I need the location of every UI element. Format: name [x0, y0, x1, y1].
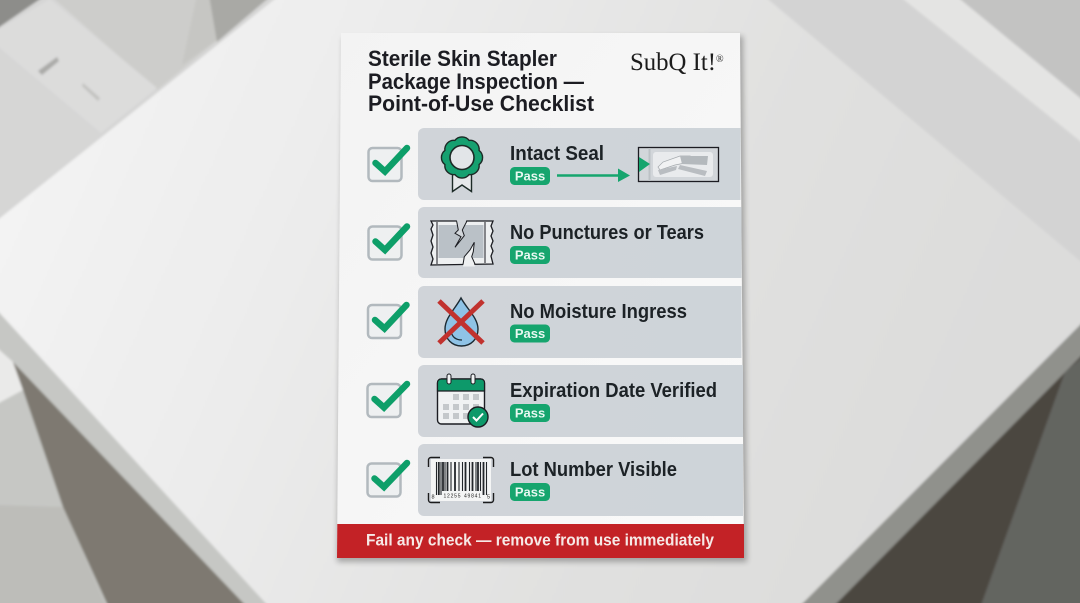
icon: barcode: 5 [487, 494, 490, 500]
icon: seal rosette [441, 137, 483, 192]
warning banner: Fail any check — remove from use immediately [366, 532, 715, 550]
row 4: expiration date verified [368, 365, 743, 437]
background: lower right cabinet [798, 320, 1080, 603]
item label: lot number visible: Lot Number Visible [510, 459, 677, 481]
panel: checklist card [337, 33, 744, 558]
background: upper left room [0, 0, 280, 222]
pass badge 5: Pass [515, 484, 545, 500]
title: Sterile Skin Stapler [368, 46, 557, 71]
checkbox 4 [368, 384, 407, 417]
icon: torn package [431, 220, 493, 266]
pass badge 3 [510, 324, 550, 342]
checkbox 1 [368, 148, 407, 181]
checkbox 5 [368, 463, 407, 496]
pass badge 2: Pass [515, 248, 545, 262]
icon: barcode: 49841 [464, 494, 481, 500]
background: lower left cabinet [0, 308, 270, 603]
icon: barcode [428, 458, 494, 502]
background: upper right wall band [763, 0, 1080, 265]
pass badge 3: Pass [515, 326, 545, 341]
title [368, 46, 595, 116]
pass badge 5 [510, 483, 550, 501]
item label: no punctures or tears: No Punctures or Tears [510, 222, 704, 244]
pass badge 4 [510, 404, 550, 422]
pass badge 2 [510, 246, 550, 264]
pass badge 4: Pass [515, 406, 545, 420]
row 2: no punctures or tears [368, 207, 742, 278]
row 1: intact seal [368, 128, 740, 200]
logo: SubQ It!: SubQ It! [630, 49, 716, 76]
icon: barcode: 8 [432, 494, 435, 500]
card shadow [337, 36, 747, 562]
warning banner [337, 524, 744, 558]
arrow [557, 168, 630, 182]
row 5: lot number visible [368, 444, 743, 516]
logo: SubQ It!: ® [716, 54, 724, 65]
thumbnail: packaged stapler [638, 148, 718, 182]
pass badge 1 [510, 167, 550, 185]
icon: calendar with check [438, 374, 488, 427]
item label: intact seal: Intact Seal [510, 143, 604, 165]
item label: expiration date verified: Expiration Date Verified [510, 380, 717, 402]
item label: no moisture ingress: No Moisture Ingress [510, 301, 687, 323]
title: Point-of-Use Checklist [368, 91, 595, 116]
title: Package Inspection — [368, 69, 584, 94]
row 3: no moisture ingress [368, 286, 742, 358]
icon: barcode: 12255 [444, 494, 461, 500]
checkbox 3 [368, 305, 406, 338]
pass badge 1: Pass [515, 168, 545, 184]
icon: crossed-out water drop [439, 298, 483, 346]
checkbox 2 [368, 226, 407, 260]
